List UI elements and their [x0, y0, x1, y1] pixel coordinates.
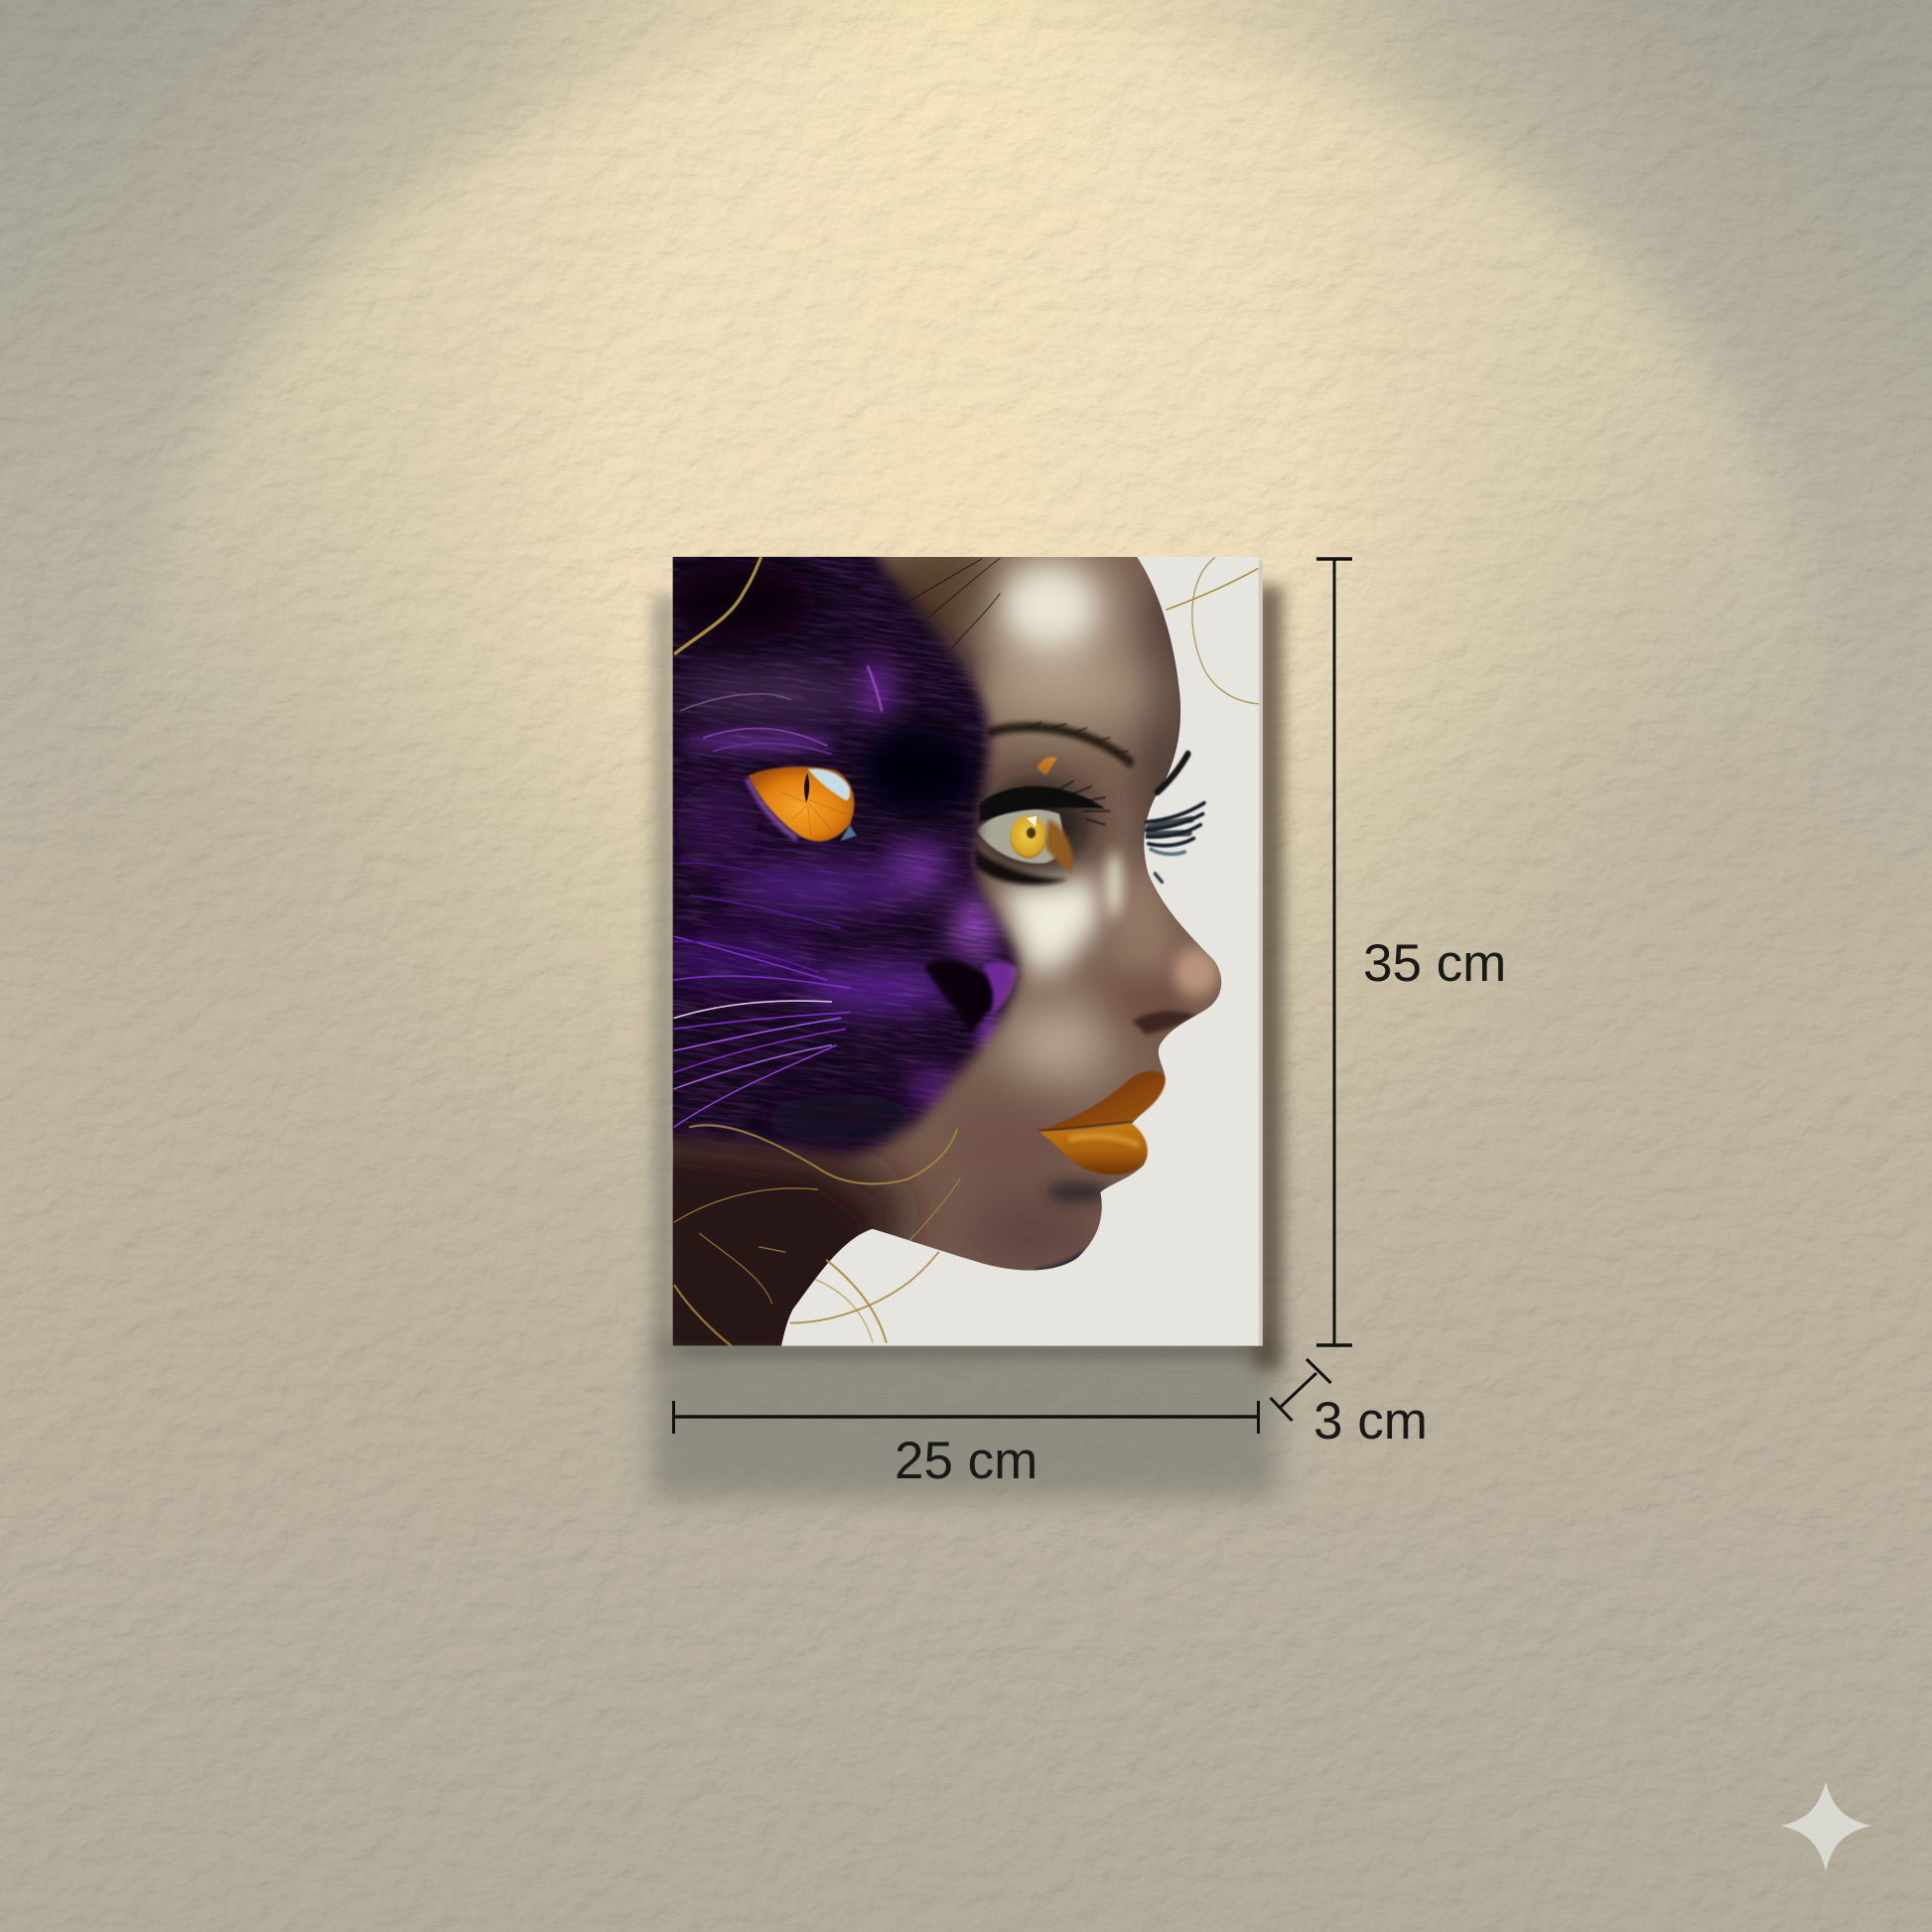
eyebrow [991, 723, 1130, 762]
cat nose [925, 960, 996, 1032]
fur texture [647, 776, 1033, 1124]
nostril [1133, 1011, 1196, 1035]
gold strands [675, 558, 1259, 1342]
dimension: width 25 cm: 25 cm [895, 1432, 1037, 1490]
purple cat face [643, 536, 1044, 1173]
canvas right edge [1256, 561, 1263, 1346]
dimension: height 35 cm: 35 cm [1363, 934, 1506, 993]
dimension: depth 3 cm [1271, 1359, 1428, 1450]
gold lines on neck [674, 1178, 960, 1346]
cat fur and whiskers [674, 667, 882, 1127]
dimension: depth 3 cm: 3 cm [1313, 1392, 1428, 1450]
canvas shadow on wall [651, 586, 1283, 1499]
jaw and neck [941, 1102, 1077, 1178]
mid face light [1000, 874, 1105, 972]
woman eye [975, 781, 1110, 885]
canvas print: woman and purple cat portrait [635, 536, 1263, 1353]
canvas white background [673, 557, 1259, 1346]
hair fade on forehead [831, 552, 1000, 689]
icon: four-point sparkle [1781, 1781, 1871, 1871]
cat eye [748, 766, 857, 841]
woman face [673, 556, 1221, 1346]
lips [1038, 1071, 1166, 1174]
far eyelashes [1146, 754, 1204, 882]
eye socket shadow [980, 778, 1093, 871]
forehead light [1128, 573, 1181, 923]
dark fur zones [859, 724, 977, 816]
